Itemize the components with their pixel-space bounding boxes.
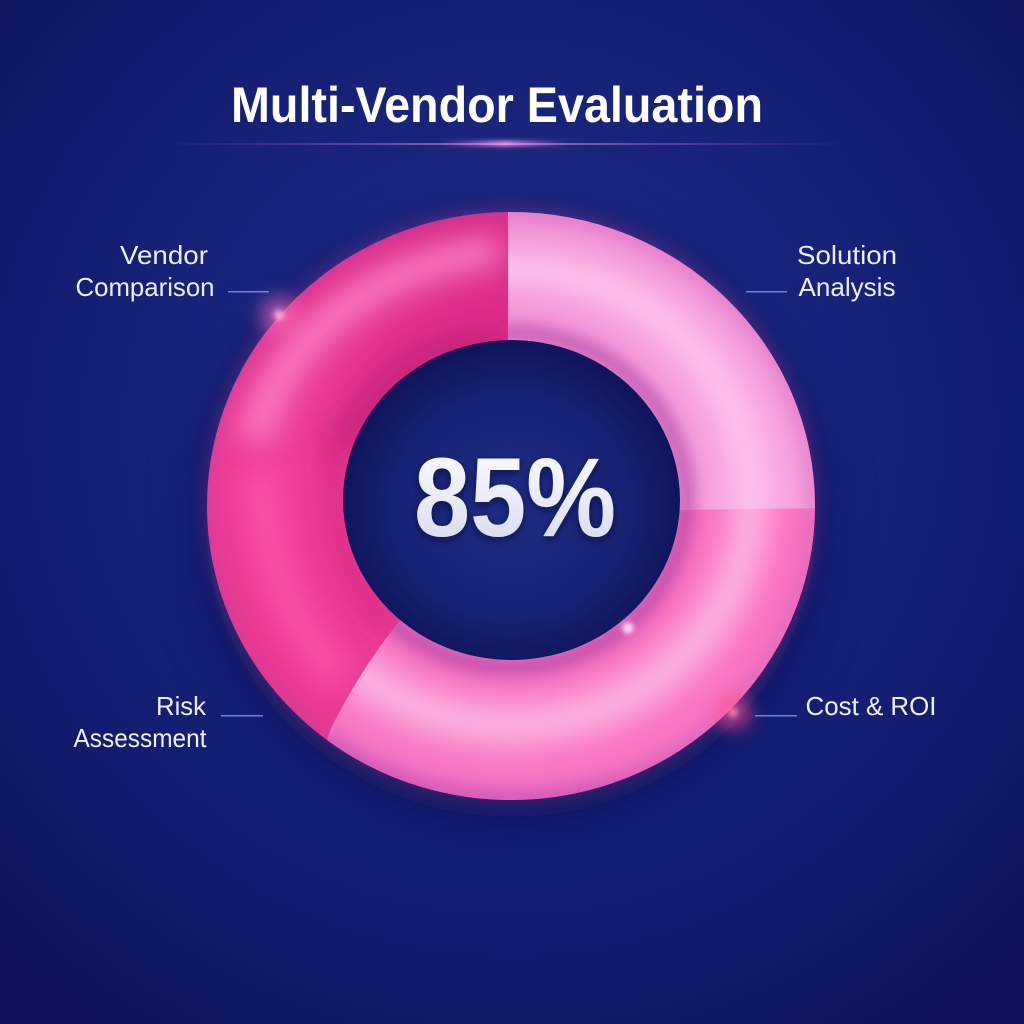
label: Vendor Comparison (76, 240, 269, 302)
title: Multi-Vendor Evaluation (231, 77, 763, 133)
right side tube highlight (327, 212, 815, 800)
segment: Solution Analysis (508, 200, 830, 510)
label: Vendor Comparison: Comparison (76, 272, 214, 302)
donut chart (207, 212, 815, 800)
donut drop shadow (206, 227, 816, 817)
label: Cost and ROI: Cost & ROI (806, 691, 936, 721)
title underline glow (160, 141, 850, 146)
segment: Cost and ROI (327, 508, 815, 800)
center value: 85% (414, 435, 616, 560)
donut outer glow (205, 208, 817, 800)
label: Risk Assessment: Assessment (74, 723, 207, 753)
label: Vendor Comparison: Vendor (120, 240, 208, 270)
label: Solution Analysis (746, 240, 897, 302)
label: Risk Assessment (74, 691, 263, 753)
left segment highlight (207, 212, 508, 740)
segment: Vendor Comparison (207, 212, 508, 740)
label: Solution Analysis: Analysis (798, 272, 896, 302)
sparkles (259, 295, 751, 730)
label: Solution Analysis: Solution (797, 240, 897, 270)
label: Risk Assessment: Risk (156, 691, 207, 721)
donut hole (339, 336, 683, 664)
